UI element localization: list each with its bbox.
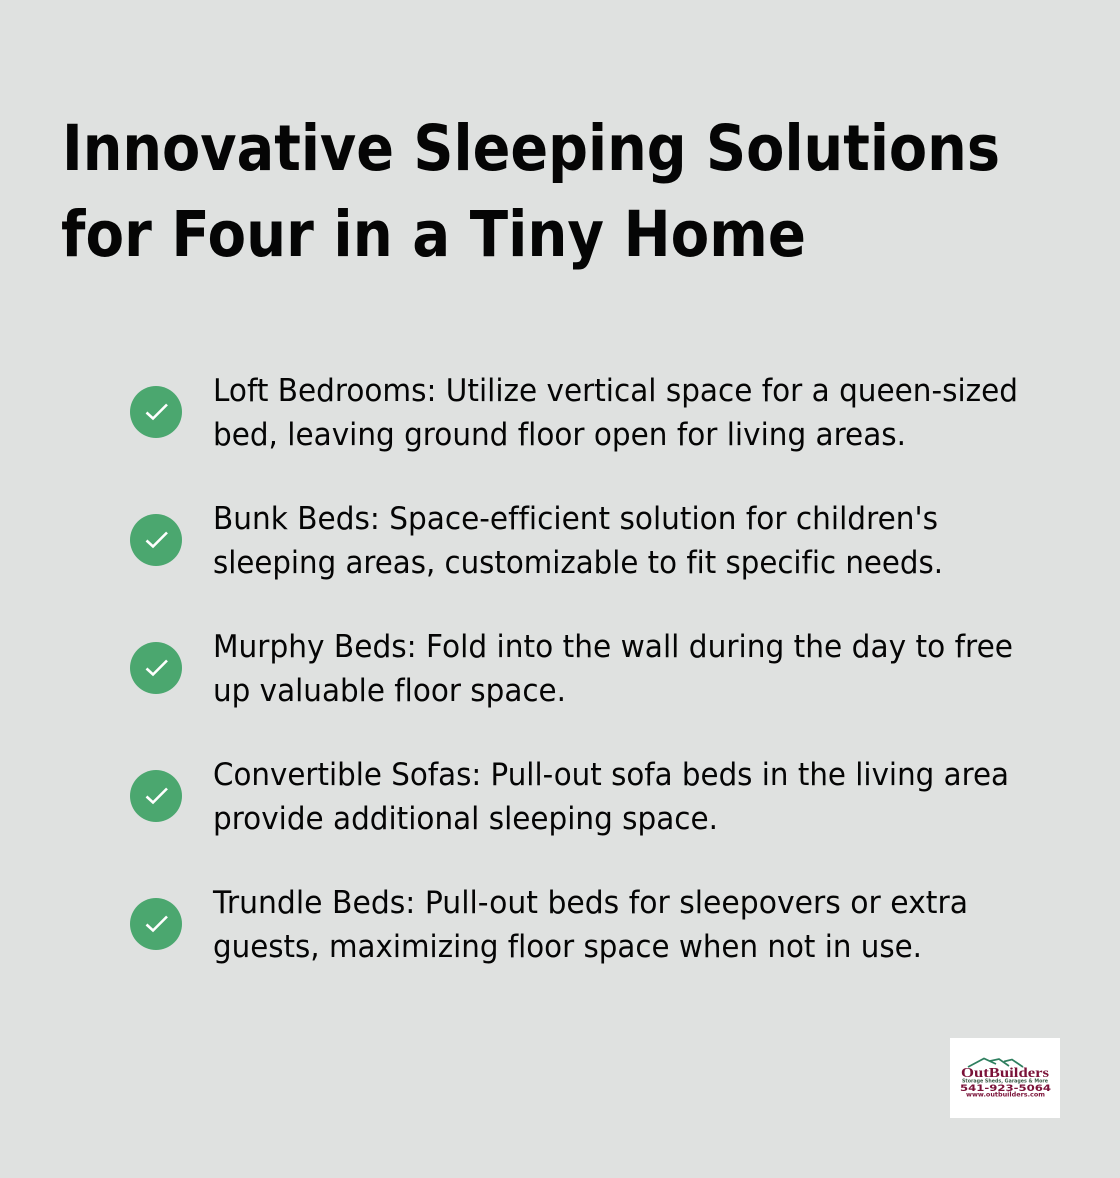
logo: OutBuilders: www.outbuilders.com [966,1092,1045,1098]
text: loft bedrooms [213,373,1018,453]
text: convertible sofas: Convertible Sofas: Pull-out sofa beds in the living area [213,757,1009,793]
logo: OutBuilders: OutBuilders [961,1066,1050,1081]
text: loft bedrooms: Loft Bedrooms: Utilize vertical space for a queen-sized [213,373,1018,409]
text: loft bedrooms: bed, leaving ground floor open for living areas. [213,417,906,453]
item: murphy beds [130,629,1013,709]
list of sleeping solutions [130,373,1018,965]
text: bunk beds [213,501,943,581]
text: bunk beds: Bunk Beds: Space-efficient solution for children's [213,501,938,537]
text: trundle beds [212,885,968,965]
icon: check badge [130,898,182,950]
text: murphy beds: up valuable floor space. [213,673,566,709]
text: trundle beds: Trundle Beds: Pull-out beds for sleepovers or extra [212,885,968,921]
title: Innovative Sleeping Solutions [62,112,1000,185]
icon: check badge [130,642,182,694]
logo: OutBuilders: Storage Sheds, Garages & More [962,1078,1049,1084]
item: trundle beds [130,885,968,965]
text: bunk beds: sleeping areas, customizable to fit specific needs. [213,545,943,581]
logo: OutBuilders: 541-923-5064 [960,1084,1051,1094]
text: murphy beds: Murphy Beds: Fold into the wall during the day to free [213,629,1013,665]
logo: OutBuilders [950,1038,1060,1118]
icon: roofline [968,1058,1023,1067]
text: convertible sofas [213,757,1009,837]
item: convertible sofas [130,757,1009,837]
title: for Four in a Tiny Home [61,198,806,271]
text: trundle beds: guests, maximizing floor space when not in use. [213,929,922,965]
text: convertible sofas: provide additional sleeping space. [213,801,718,837]
text: murphy beds [213,629,1013,709]
icon: check badge [130,386,182,438]
item: loft bedrooms [130,373,1018,453]
icon: check badge [130,514,182,566]
item: bunk beds [130,501,943,581]
title [61,112,1000,271]
icon: check badge [130,770,182,822]
